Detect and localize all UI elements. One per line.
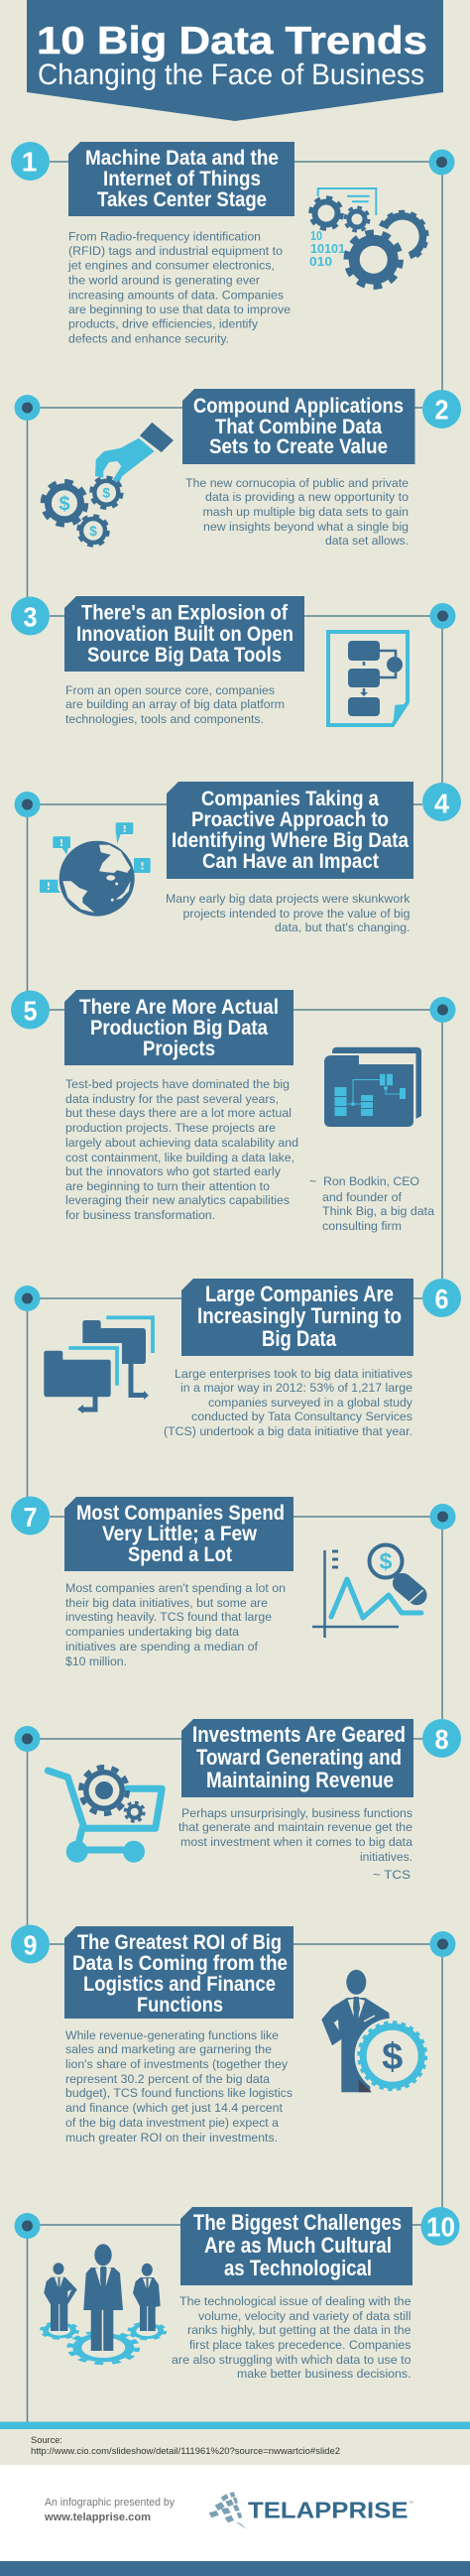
body text 7: their big data initiatives, but some are — [65, 1596, 268, 1610]
title banner: Changing the Face of Business — [38, 59, 424, 91]
body text 6: in a major way in 2012: 53% of 1,217 large — [180, 1381, 412, 1395]
body text 4: Many early big data projects were skunkwork — [166, 892, 411, 906]
body text 10: ranks highly, but getting at the data in the — [187, 2323, 411, 2337]
heading 7: Spend a Lot — [128, 1543, 232, 1566]
body text 9: much greater ROI on their investments. — [65, 2131, 278, 2145]
heading 1: Machine Data and the — [85, 147, 279, 170]
body text 1: the world around is generating ever — [68, 274, 260, 288]
body text 8: ~ TCS — [373, 1868, 411, 1882]
icon: businessman with dollar gear — [321, 1970, 430, 2094]
heading 8: Investments Are Geared — [192, 1722, 406, 1747]
body text 8: Perhaps unsurprisingly, business functions — [181, 1806, 412, 1820]
body text 4: data, but that's changing. — [275, 920, 411, 934]
body text 1 — [67, 229, 291, 345]
icon: hand and dollar gears: $ — [59, 494, 70, 516]
body text 5: Test-bed projects have dominated the big — [65, 1077, 290, 1091]
heading 6: Big Data — [262, 1326, 337, 1351]
body text 10: make better business decisions. — [237, 2367, 411, 2381]
heading 3 — [64, 596, 304, 672]
number badge 1: 1 — [22, 146, 37, 177]
body text 5 — [65, 1077, 298, 1222]
timeline dot 9 — [430, 1931, 456, 1957]
section 8 — [14, 1719, 461, 1882]
heading 1: Internet of Things — [103, 168, 261, 190]
number badge 4: 4 — [434, 788, 449, 818]
body text 9 — [65, 2028, 293, 2145]
heading 4: Can Have an Impact — [202, 850, 379, 873]
heading 5: There Are More Actual — [79, 996, 279, 1019]
attribution 5: and founder of — [322, 1190, 403, 1204]
heading 7: Very Little; a Few — [102, 1523, 258, 1545]
heading 9: Functions — [137, 1994, 223, 2017]
heading 4: Companies Taking a — [201, 788, 379, 810]
section 6 — [14, 1279, 461, 1438]
timeline dot 4 — [14, 792, 40, 817]
heading 5: Projects — [143, 1038, 215, 1060]
heading 2 — [182, 389, 414, 464]
bottom bar — [0, 2561, 470, 2576]
body text 7 — [65, 1581, 286, 1668]
body text 5: for business transformation. — [65, 1208, 215, 1222]
icon: shopping cart with gears — [48, 1768, 162, 1863]
heading 8: Maintaining Revenue — [206, 1768, 394, 1792]
timeline dot 2 — [14, 395, 40, 421]
source text: http://www.cio.com/slideshow/detail/111961%20?source=nwwartcio#slide2 — [31, 2446, 340, 2457]
body text 9: budget), TCS found functions like logistics — [65, 2086, 293, 2100]
body text 5: largely about achieving data scalability and — [65, 1136, 298, 1150]
title banner: 10 Big Data Trends — [37, 20, 427, 62]
icon: hand and dollar gears: $ — [102, 485, 110, 501]
icon: businessman with dollar gear: $ — [382, 2036, 403, 2078]
body text 6: Large enterprises took to big data initiatives — [175, 1367, 412, 1381]
heading 3: Innovation Built on Open — [76, 623, 294, 646]
number badge 8 — [422, 1719, 461, 1758]
body text 6 — [164, 1367, 413, 1438]
heading 2: Sets to Create Value — [209, 435, 388, 458]
body text 5: but these days there are a lot more actual — [65, 1106, 292, 1120]
body text 7: initiatives are spending a median of — [65, 1640, 259, 1654]
icon: flowchart document — [328, 632, 408, 725]
body text 4 — [166, 892, 411, 934]
body text 2: data is providing a new opportunity to — [205, 490, 409, 504]
body text 6: (TCS) undertook a big data initiative that year. — [164, 1424, 412, 1438]
heading 8: Toward Generating and — [196, 1745, 402, 1770]
number badge 8: 8 — [434, 1724, 448, 1755]
body text 9: of the big data investment pie) expect a — [65, 2116, 279, 2130]
body text 10: The technological issue of dealing with the — [179, 2294, 411, 2308]
source text — [31, 2435, 340, 2457]
heading 8 — [181, 1719, 413, 1797]
number badge 5 — [11, 990, 50, 1030]
heading 5 — [64, 990, 294, 1065]
attribution 5: ~ — [309, 1174, 316, 1188]
body text 8: most investment when it comes to big data — [180, 1835, 412, 1849]
body text 10: first place takes precedence. Companies — [189, 2338, 411, 2352]
heading 3: There's an Explosion of — [81, 601, 289, 625]
number badge 9 — [11, 1924, 50, 1964]
number badge 10 — [420, 2207, 460, 2246]
body text 5: but the innovators who got started early — [65, 1165, 282, 1178]
number badge 5: 5 — [24, 996, 38, 1027]
attribution 5: Ron Bodkin, CEO — [323, 1174, 419, 1188]
body text 2: The new cornucopia of public and private — [185, 476, 409, 490]
heading 4: Proactive Approach to — [191, 808, 389, 831]
body text 8: that generate and maintain revenue get the — [178, 1820, 412, 1834]
icon: gears and binary: 010 — [309, 254, 332, 269]
body text 9: and finance (which get just 14.4 percent — [65, 2101, 284, 2115]
number badge 7: 7 — [24, 1502, 38, 1533]
cyan footer rule — [0, 2422, 470, 2429]
body text 1: jet engines and consumer electronics, — [67, 259, 275, 273]
number badge 4 — [422, 783, 461, 821]
heading 9: The Greatest ROI of Big — [77, 1931, 282, 1954]
body text 10 — [172, 2294, 411, 2381]
body text 8 — [178, 1806, 412, 1882]
timeline dot 6 — [14, 1286, 40, 1311]
body text 2: mash up multiple big data sets to gain — [202, 505, 409, 519]
body text 2: data set allows. — [325, 534, 409, 548]
section 4 — [14, 782, 461, 934]
body text 1: (RFID) tags and industrial equipment to — [68, 244, 283, 258]
number badge 10: 10 — [426, 2211, 455, 2242]
heading 9: Logistics and Finance — [83, 1973, 276, 1996]
section 9 — [11, 1924, 456, 2145]
icon: gears and binary — [309, 188, 427, 287]
icon: folders with arrows — [44, 1317, 153, 1413]
section 10 — [14, 2207, 460, 2381]
icon: hand and dollar gears: $ — [89, 523, 97, 539]
body text 2: new insights beyond what a single big — [203, 520, 409, 534]
body text 5: cost containment, like building a data lake, — [65, 1151, 294, 1165]
heading 9: Data Is Coming from the — [72, 1952, 288, 1975]
heading 7 — [64, 1497, 294, 1571]
body text 9: lion's share of investments (together they — [65, 2057, 289, 2071]
logo: Telapprise: TELAPPRISE — [248, 2497, 409, 2522]
heading 1: Takes Center Stage — [97, 188, 267, 211]
body text 5: data industry for the past several years, — [65, 1092, 279, 1106]
icon: gears and binary: 10 — [310, 228, 322, 243]
body text 1: defects and enhance security. — [68, 331, 229, 345]
body text 7: companies undertaking big data — [65, 1625, 239, 1639]
heading 3: Source Big Data Tools — [87, 644, 282, 667]
body text 1: From Radio-frequency identification — [68, 229, 261, 243]
body text 7: investing heavily. TCS found that large — [65, 1610, 272, 1624]
body text 5: production projects. These projects are — [65, 1121, 276, 1135]
timeline dot 3 — [430, 603, 456, 629]
body text 1: are beginning to use that data to improve — [68, 303, 291, 316]
section 1 — [11, 142, 454, 345]
heading 4 — [167, 782, 413, 879]
body text 3: are building an array of big data platform — [65, 697, 285, 711]
presented by text: An infographic presented by — [45, 2497, 175, 2509]
heading 5: Production Big Data — [90, 1017, 268, 1040]
section 2 — [14, 389, 461, 548]
body text 1: increasing amounts of data. Companies — [68, 288, 284, 302]
heading 2: That Combine Data — [215, 416, 382, 438]
logo: Telapprise: ™ — [409, 2501, 413, 2507]
body text 9: represent 30.2 percent of the big data — [65, 2072, 270, 2086]
icon: folder with diagram — [324, 1047, 421, 1127]
heading 10: Are as Much Cultural — [204, 2233, 392, 2258]
heading 2: Compound Applications — [193, 395, 404, 418]
attribution 5: Think Big, a big data — [322, 1204, 434, 1218]
attribution 5 — [309, 1174, 434, 1233]
logo: Telapprise — [209, 2492, 413, 2529]
body text 4: projects intended to prove the value of big — [182, 907, 411, 920]
number badge 6: 6 — [434, 1284, 448, 1314]
number badge 6 — [422, 1279, 461, 1317]
body text 6: conducted by Tata Consultancy Services — [191, 1410, 412, 1423]
section 5 — [11, 990, 456, 1233]
title banner — [27, 0, 443, 121]
body text 9: While revenue-generating functions like — [65, 2028, 279, 2042]
number badge 2: 2 — [434, 395, 448, 426]
icon: globe with alerts — [40, 822, 151, 917]
body text 5: leveraging their new analytics capabilities — [65, 1193, 290, 1207]
presented by text: www.telapprise.com — [44, 2512, 151, 2523]
presented by text — [44, 2497, 175, 2523]
icon: hand and dollar gears — [43, 423, 174, 546]
body text 3: From an open source core, companies — [65, 683, 275, 697]
timeline dot 7 — [430, 1504, 456, 1530]
section 3 — [11, 596, 456, 726]
number badge 3 — [11, 597, 50, 635]
number badge 2 — [422, 390, 461, 429]
body text 7: $10 million. — [65, 1655, 127, 1668]
timeline connector lines — [28, 162, 442, 2422]
body text 1: products, drive efficiencies, identify — [68, 317, 259, 331]
body text 7: Most companies aren't spending a lot on — [65, 1581, 286, 1595]
number badge 9: 9 — [24, 1930, 38, 1961]
heading 10: The Biggest Challenges — [193, 2210, 402, 2235]
heading 1 — [68, 142, 294, 216]
timeline dot 10 — [14, 2213, 40, 2239]
number badge 1 — [11, 142, 50, 181]
number badge 3: 3 — [24, 602, 38, 633]
source text: Source: — [31, 2435, 62, 2446]
body text 2 — [185, 476, 409, 548]
timeline dot 5 — [430, 997, 456, 1023]
heading 7: Most Companies Spend — [76, 1502, 285, 1525]
icon: gears and binary: 10101 — [310, 241, 345, 256]
body text 9: sales and marketing are garnering the — [65, 2042, 272, 2056]
icon: three businessmen on gears — [42, 2244, 165, 2364]
icon: chart with magnifier — [312, 1545, 431, 1638]
heading 10 — [180, 2207, 412, 2285]
body text 10: are also struggling with which data to use to — [172, 2353, 411, 2367]
white footer band — [0, 2465, 470, 2561]
heading 6: Increasingly Turning to — [197, 1303, 402, 1328]
heading 10: as Technological — [224, 2256, 372, 2280]
body text 3: technologies, tools and components. — [65, 712, 264, 726]
attribution 5: consulting firm — [322, 1219, 402, 1233]
heading 6 — [181, 1279, 413, 1356]
heading 6: Large Companies Are — [205, 1282, 394, 1306]
timeline dot 1 — [428, 149, 454, 175]
body text 8: initiatives. — [360, 1850, 412, 1864]
section 7 — [11, 1496, 456, 1668]
heading 4: Identifying Where Big Data — [172, 829, 409, 852]
number badge 7 — [11, 1496, 50, 1535]
icon: chart with magnifier: $ — [380, 1548, 393, 1574]
body text 5: are beginning to turn their attention to — [65, 1179, 270, 1193]
body text 6: companies surveyed in a global study — [208, 1396, 413, 1410]
heading 9 — [64, 1926, 294, 2019]
body text 3 — [65, 683, 285, 726]
timeline dot 8 — [14, 1726, 40, 1752]
body text 10: volume, velocity and variety of data still — [198, 2309, 411, 2323]
